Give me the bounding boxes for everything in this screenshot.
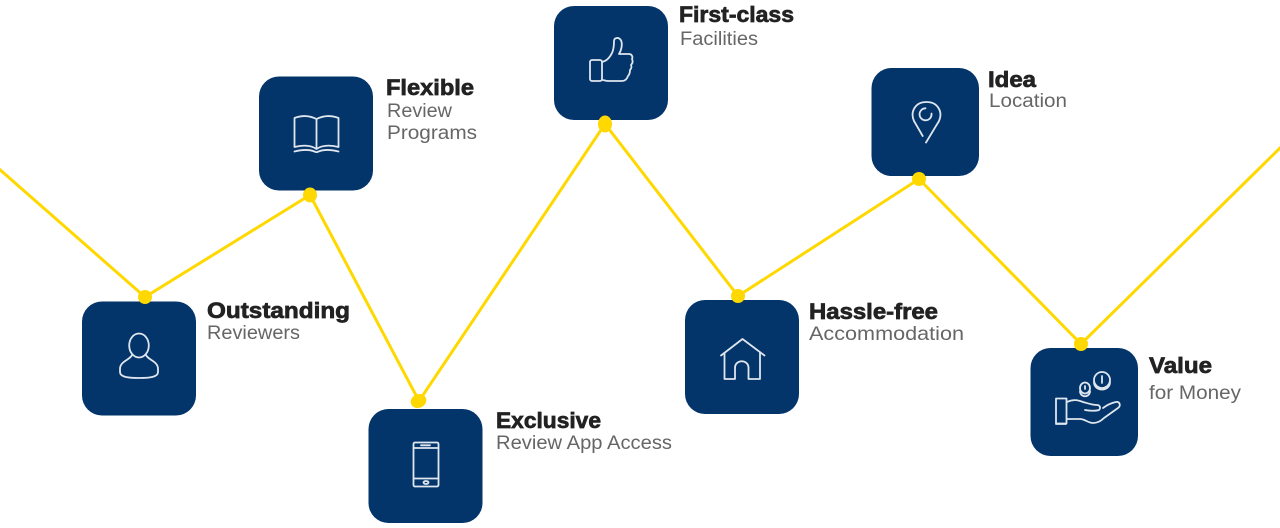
tile: First-class — [554, 6, 668, 120]
connector dot — [1074, 337, 1088, 351]
item: Hassle-free Accommodation — [685, 289, 964, 414]
connector dot — [731, 289, 745, 303]
item: Flexible Review Programs — [259, 75, 477, 202]
connector dot — [912, 172, 926, 186]
connector dot — [408, 391, 429, 411]
icon: person — [120, 334, 158, 378]
tile: Exclusive — [368, 409, 482, 523]
text: for Money: for Money — [1149, 383, 1242, 404]
icon: smartphone — [414, 442, 438, 486]
heading: Hassle-free: Hassle-free — [809, 299, 938, 324]
heading: Exclusive: Exclusive — [496, 408, 601, 433]
heading: Idea: Idea — [988, 67, 1037, 92]
heading: Outstanding: Outstanding — [207, 298, 350, 323]
item: Outstanding Reviewers — [82, 290, 350, 416]
text: Location: Location — [989, 91, 1067, 112]
tile: Hassle-free — [685, 300, 799, 414]
text: Review App Access: Review App Access — [496, 433, 672, 454]
icon: open book — [294, 116, 338, 152]
tile: Flexible — [259, 76, 373, 190]
text: Review Programs: Review — [387, 101, 452, 122]
tile: Outstanding — [82, 302, 196, 416]
item: First-class Facilities — [554, 2, 794, 132]
text: Facilities: Facilities — [680, 29, 758, 50]
tile: Idea — [872, 68, 979, 176]
connector dot — [138, 290, 152, 304]
heading: First-class: First-class — [679, 2, 794, 27]
text: Reviewers: Reviewers — [207, 323, 300, 344]
icon: hand with coins — [1056, 372, 1120, 424]
connector dot — [303, 188, 317, 202]
text: Review Programs: Programs — [387, 123, 477, 144]
icon: map pin — [913, 102, 940, 142]
item: Idea Location — [872, 67, 1067, 186]
tile: Value — [1030, 348, 1138, 456]
item: Value for Money — [1030, 337, 1242, 456]
text: Accommodation: Accommodation — [809, 324, 964, 345]
icon: house — [721, 339, 764, 379]
connector dot — [598, 116, 612, 132]
heading: Flexible: Flexible — [386, 75, 474, 100]
item: Exclusive Review App Access — [368, 391, 672, 523]
heading: Value: Value — [1149, 353, 1212, 378]
zigzag connector line — [0, 124, 1280, 401]
icon: thumbs up — [590, 38, 633, 81]
